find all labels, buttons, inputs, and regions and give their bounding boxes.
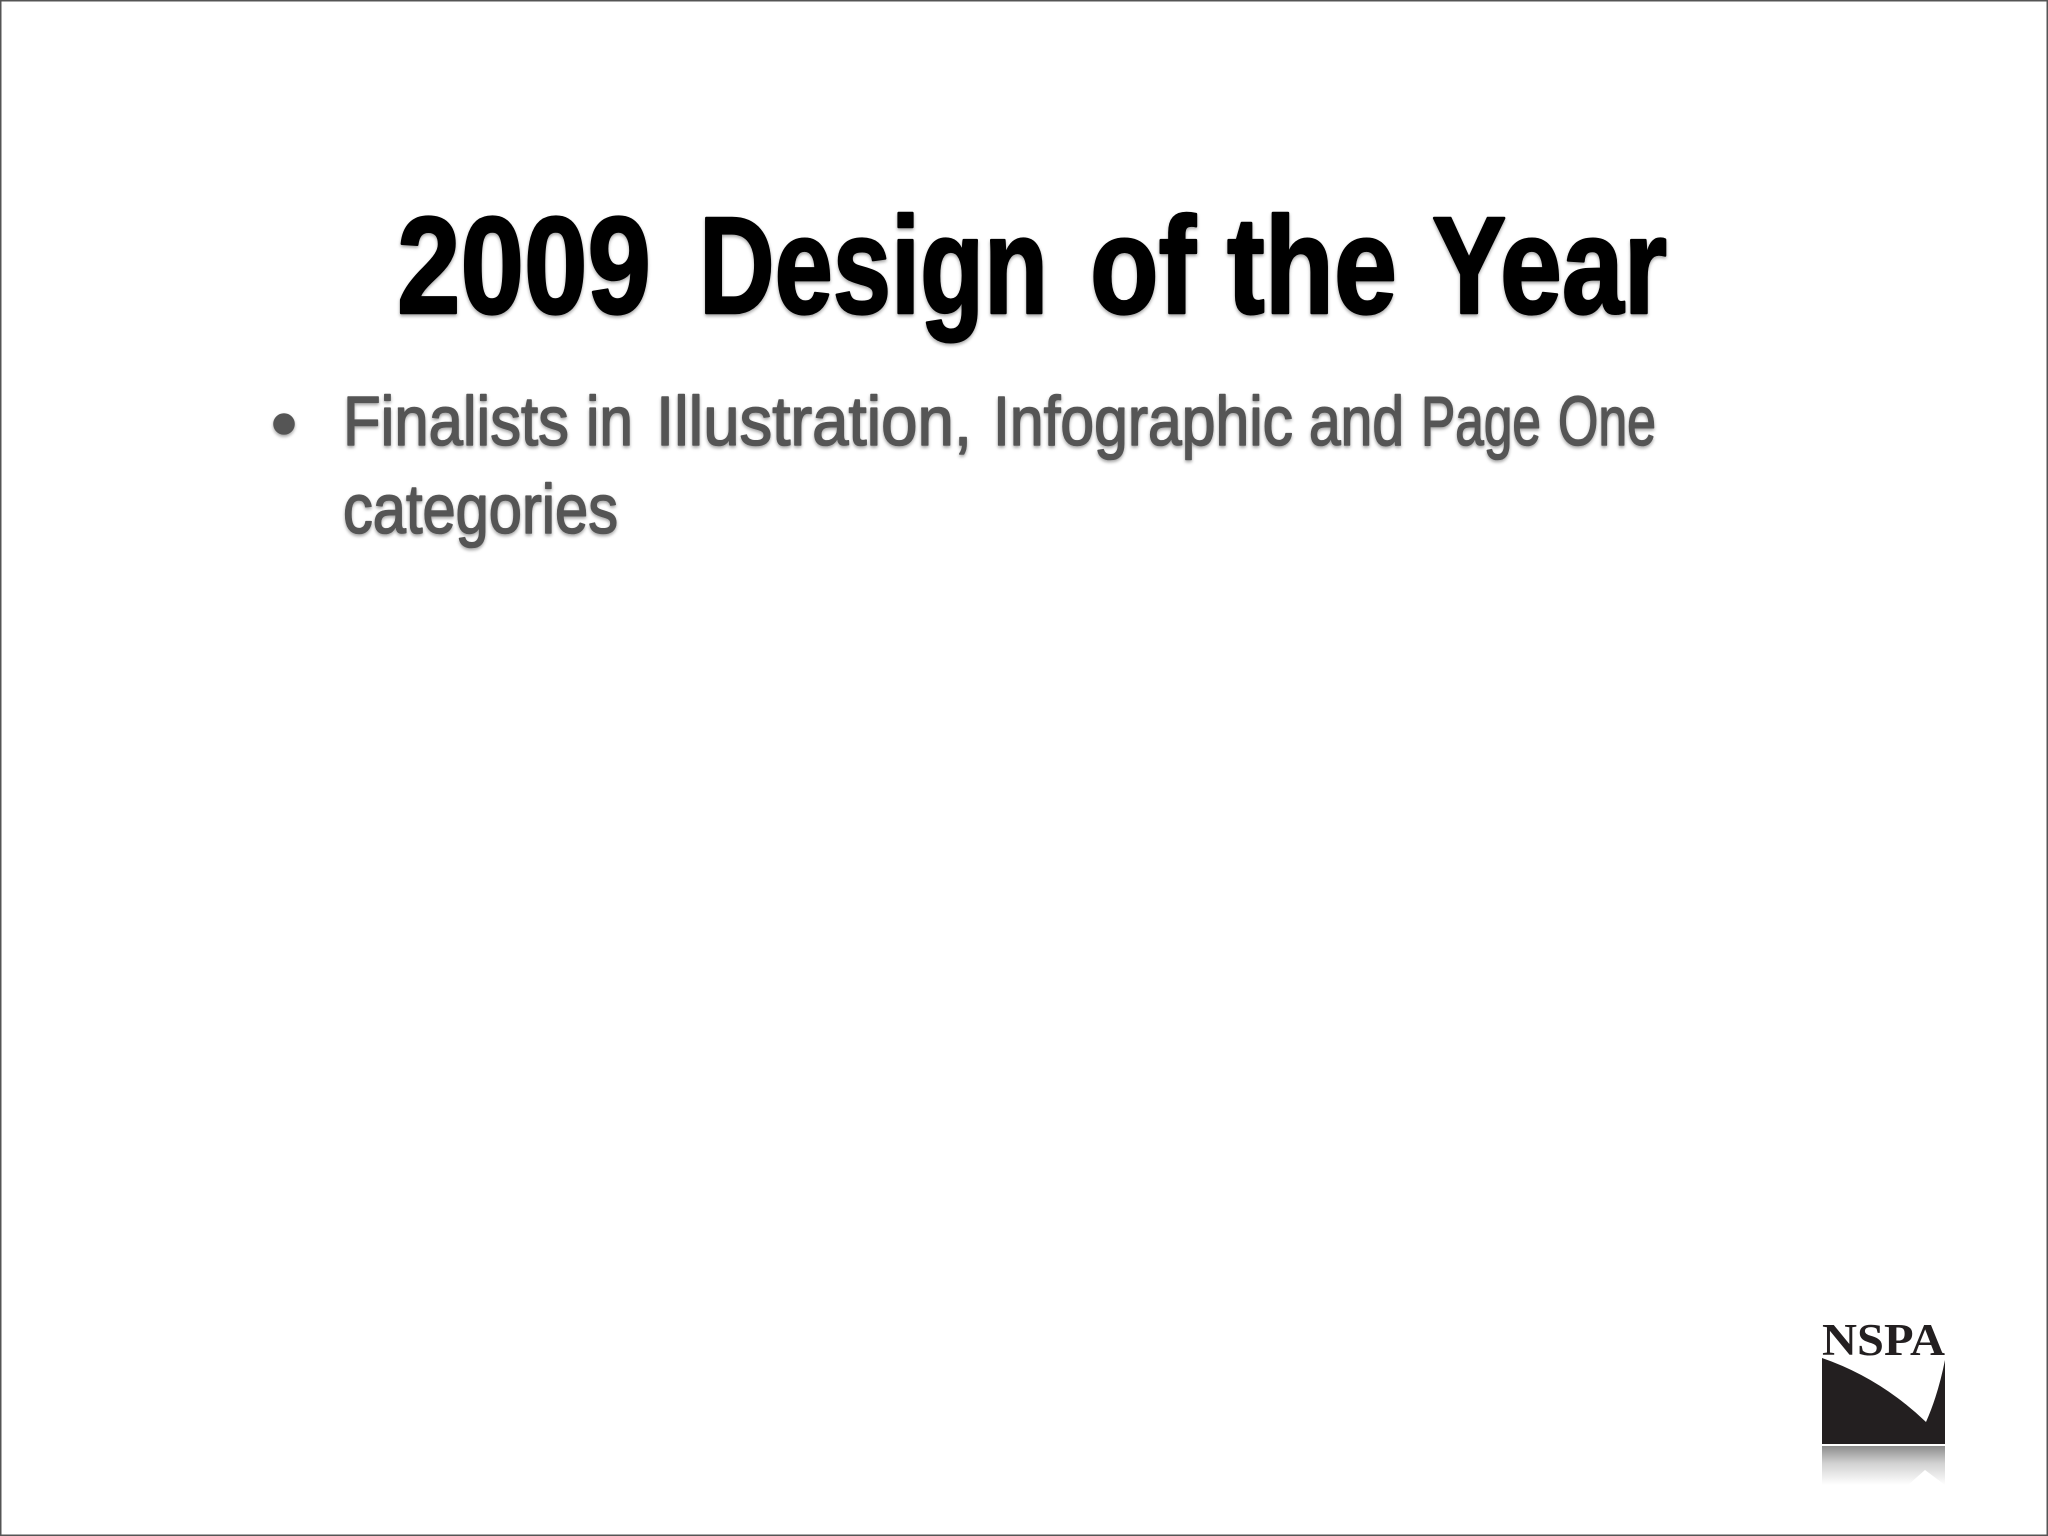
bullet text line 1: and [1309,382,1404,460]
bullet text line 2: categories [343,470,618,548]
bullet list [274,382,1656,548]
title [397,189,1667,343]
title: Year [1432,189,1667,343]
bullet text line 1: in [586,382,633,460]
logo square with check mark [1822,1358,1945,1444]
bullet text line 1: One [1558,382,1656,460]
bullet text line 1: Illustration, [656,382,972,460]
bullet marker [274,414,294,434]
title: of [1090,189,1197,343]
title: the [1227,189,1397,343]
bullet text line 1: Finalists [343,382,569,460]
title: 2009 [397,189,651,343]
title: Design [699,189,1048,343]
bullet text line 1 [343,382,1656,460]
bullet text line 1: Page [1421,382,1541,460]
logo wordmark: NSPA [1822,1315,1946,1365]
icon: NSPA logo [1822,1315,1946,1485]
bullet text line 1: Infographic [993,382,1293,460]
logo reflection [1822,1446,1945,1485]
